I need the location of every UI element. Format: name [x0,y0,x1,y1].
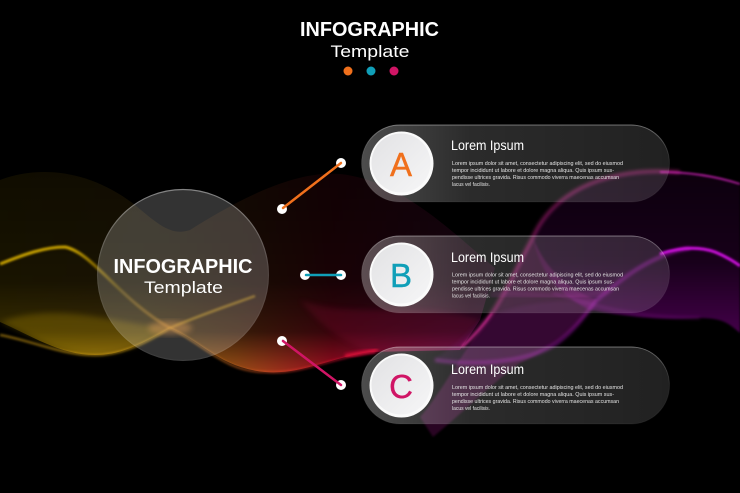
icon: letter A disc [370,132,434,196]
heading: circle title: INFOGRAPHIC [114,256,252,278]
card B body [452,272,623,300]
card A body: pendisse ultrices gravida. Risus commodo viverra maecenas accumsan [452,175,619,181]
card A body: Lorem ipsum dolor sit amet, consectetur adipiscing elit, sed do eiusmod [452,161,623,167]
card A title: Lorem Ipsum [451,138,524,153]
card B body: Lorem ipsum dolor sit amet, consectetur adipiscing elit, sed do eiusmod [452,272,623,278]
card A body: tempor incididunt ut labore et dolore magna aliqua. Quis ipsum sus- [452,168,614,174]
panel: central glass circle [97,189,269,361]
circle subtitle: Template [144,278,223,297]
card B body: pendisse ultrices gravida. Risus commodo viverra maecenas accumsan [452,286,619,292]
card A body: lacus vel facilisis. [452,182,490,188]
card C body: pendisse ultrices gravida. Risus commodo viverra maecenas accumsan [452,399,619,405]
panel: card A [362,125,670,202]
card B body: lacus vel facilisis. [452,294,490,300]
panel: card C [362,347,670,424]
three coloured dots [344,66,398,76]
heading: top title: INFOGRAPHIC [300,19,439,41]
icon: letter B disc: B [390,257,412,294]
icon: letter A disc: A [390,146,412,183]
connector B [300,270,346,280]
card C body: lacus vel facilisis. [452,406,490,412]
card B body: tempor incididunt ut labore et dolore magna aliqua. Quis ipsum sus- [452,280,614,286]
card B title: Lorem Ipsum [451,250,524,265]
icon: letter C disc [370,354,434,418]
icon: letter C disc: C [389,368,413,405]
top subtitle: Template [330,42,410,61]
card A body [452,161,623,188]
card C body: Lorem ipsum dolor sit amet, consectetur adipiscing elit, sed do eiusmod [452,385,623,391]
card C body: tempor incididunt ut labore et dolore magna aliqua. Quis ipsum sus- [452,392,614,398]
connector C [277,336,346,390]
card C title: Lorem Ipsum [451,362,524,377]
wave ribbon graphic [0,171,740,437]
connector A [277,158,346,214]
icon: letter B disc [370,242,434,306]
card C body [452,385,623,412]
panel: card B [362,236,670,313]
